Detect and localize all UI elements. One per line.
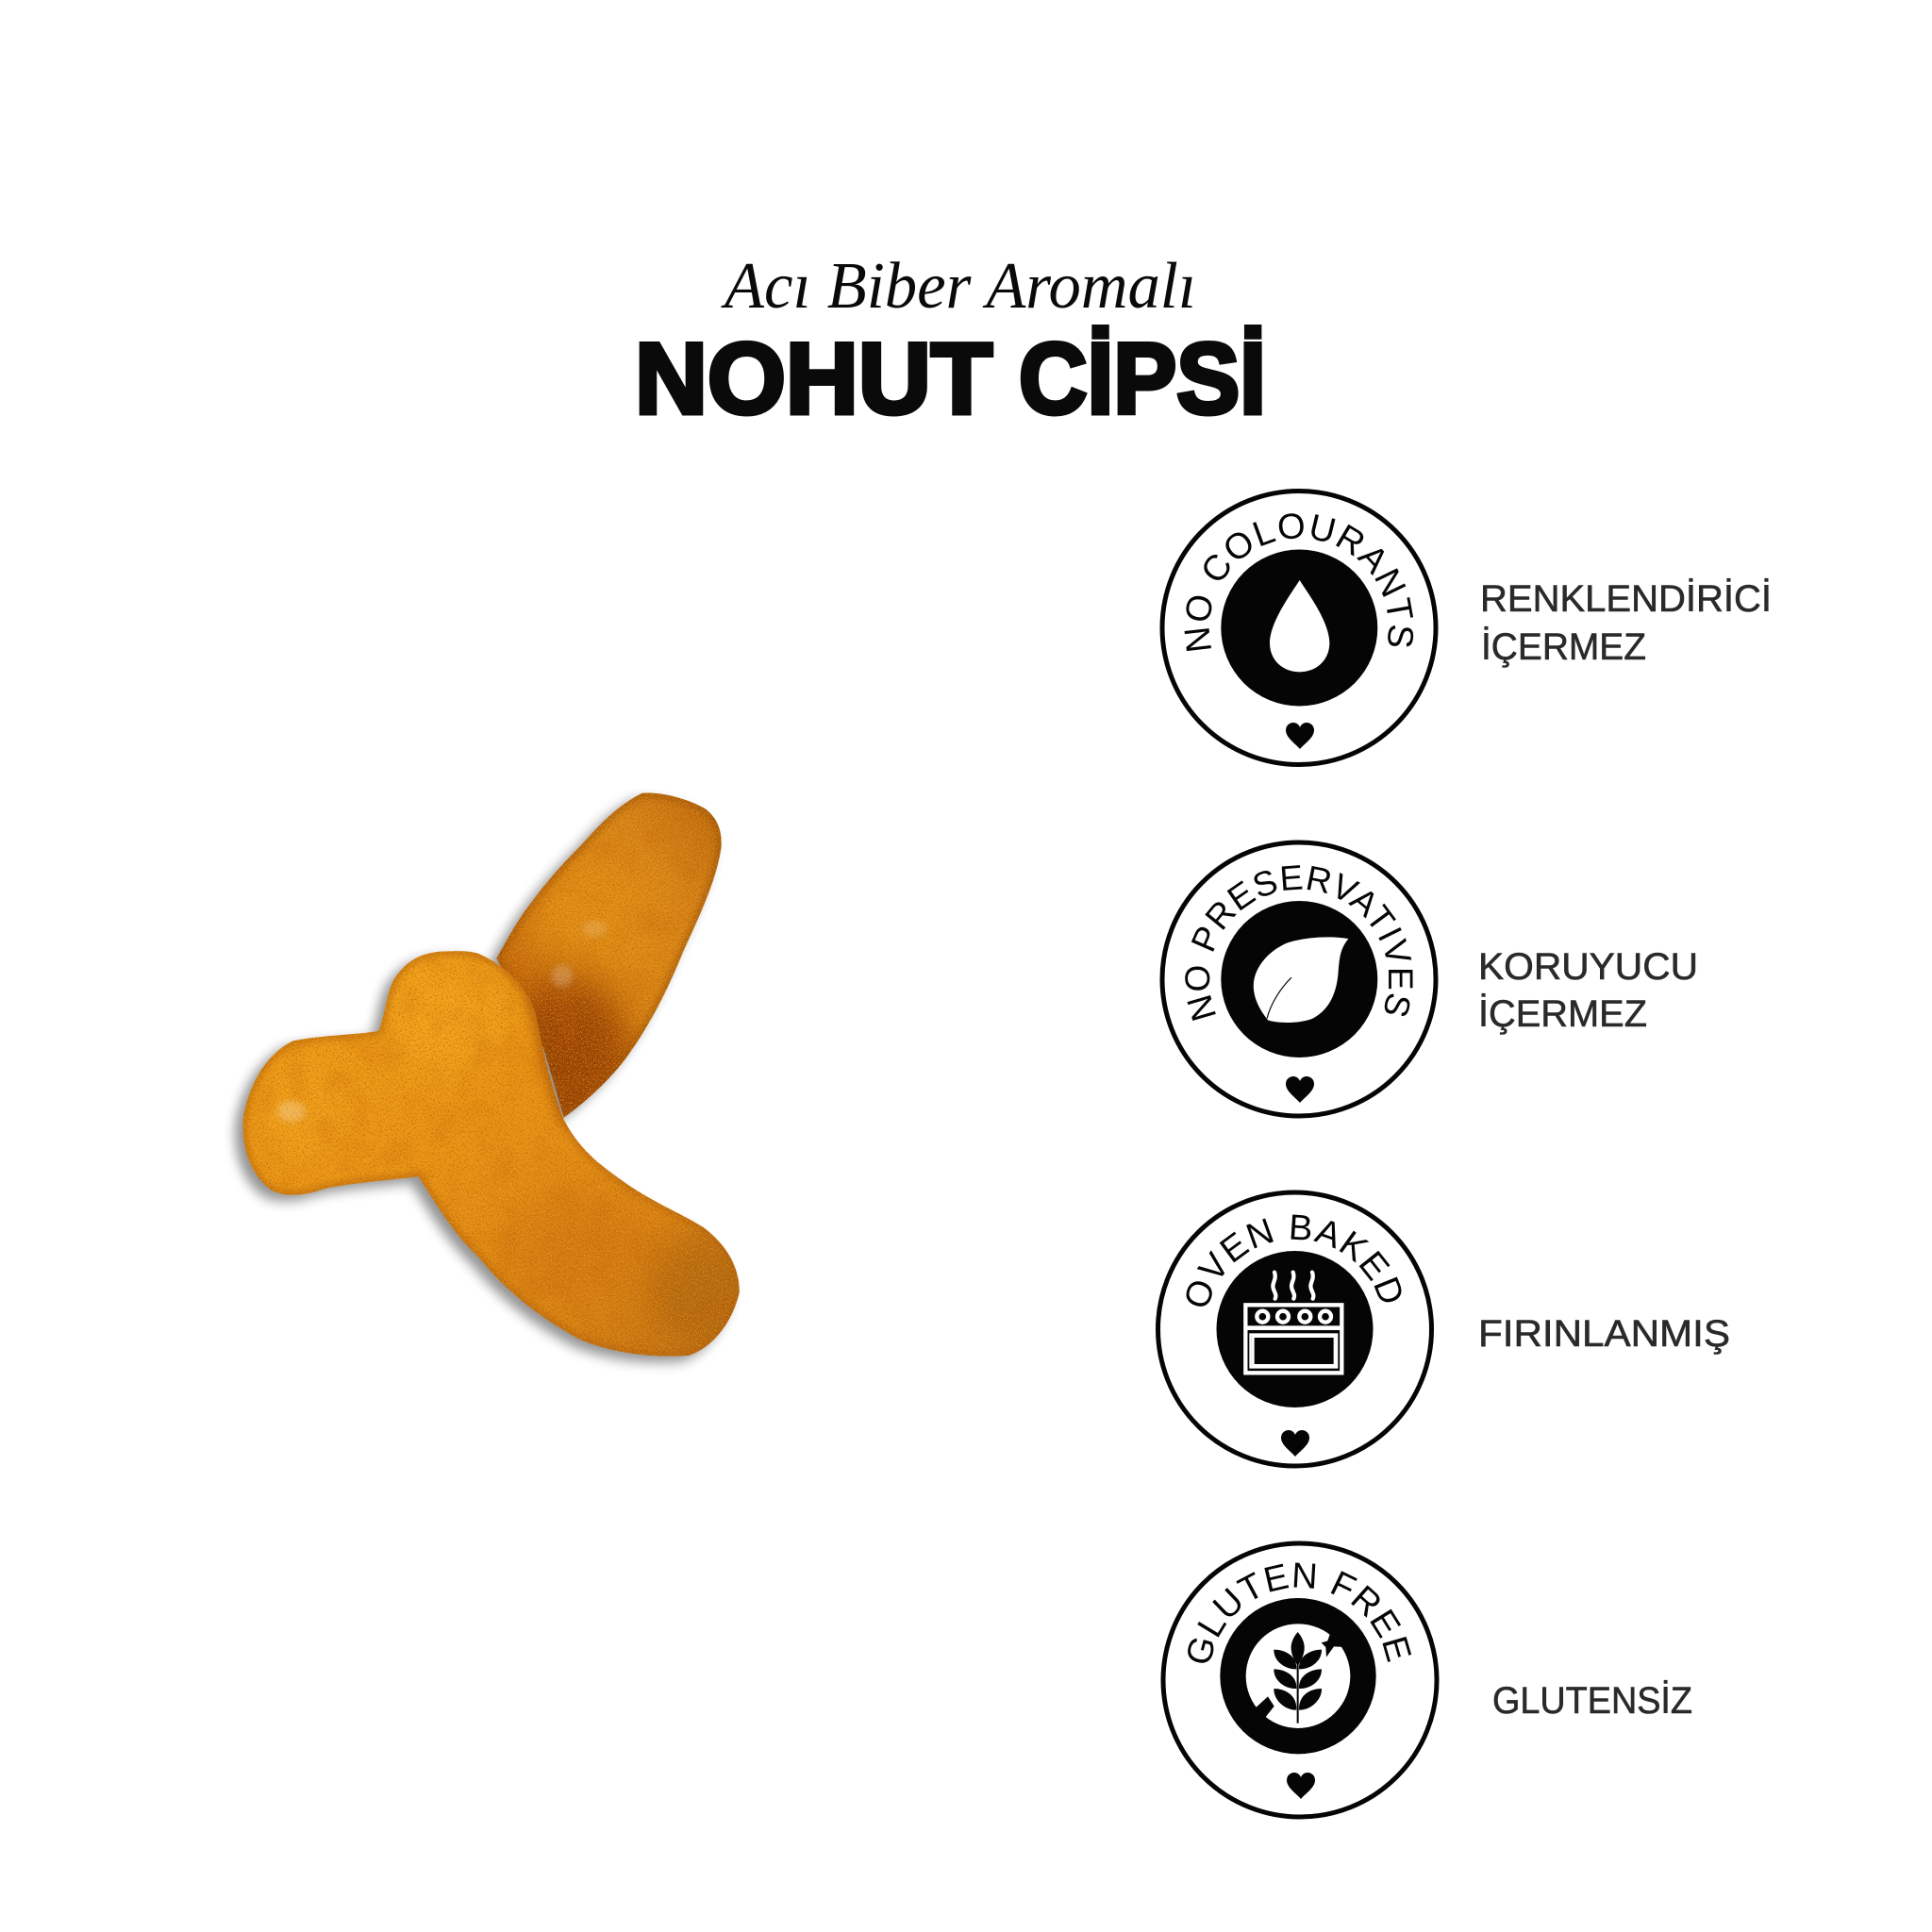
icon: no-gluten symbol [1220,1598,1376,1754]
title: NOHUT CİPSİ [635,322,1266,435]
title: NOHUT CİPSİ: CİPSİ [1019,322,1266,435]
outer ring [1162,842,1436,1116]
label: koruyucu içermez: KORUYUCU [1478,946,1698,988]
icon: leaf [1254,937,1348,1023]
icon: oven [1245,1273,1341,1373]
icon: heart [1281,1430,1309,1457]
label: glutensiz: GLUTENSİZ [1492,1679,1692,1722]
title: NOHUT CİPSİ: NOHUT [635,322,992,435]
label: koruyucu içermez: İÇERMEZ [1478,992,1647,1035]
icon: heart [1287,1773,1315,1799]
label: renklendirici içermez [1480,577,1772,668]
curved text: NO PRESERVATIVES: NO PRESERVATIVES [1185,865,1413,1021]
label: renklendirici içermez: İÇERMEZ [1481,625,1646,668]
curved text: OVEN BAKED: OVEN BAKED [1187,1215,1402,1307]
icon: water drop [1270,580,1329,672]
icon: heart [1286,723,1314,749]
badge: no colourants [1160,489,1438,767]
subtitle: Acı Biber Aromalı: Acı Biber Aromalı [721,250,1196,323]
label: renklendirici içermez: RENKLENDİRİCİ [1480,577,1772,620]
black disc [1221,549,1377,706]
label: fırınlanmış: FIRINLANMIŞ [1478,1313,1730,1355]
badge: oven baked [1156,1191,1434,1468]
product photo: chickpea snack [235,786,758,1367]
outer ring [1158,1192,1432,1466]
icon: heart [1286,1076,1314,1103]
curved text: GLUTEN FREE: GLUTEN FREE [1188,1562,1411,1663]
outer ring [1163,1543,1437,1817]
badge: no preservatives [1160,840,1438,1119]
outer ring [1162,491,1436,764]
black disc [1217,1251,1374,1407]
badge: gluten free [1160,1541,1440,1819]
black disc [1221,901,1377,1058]
label: koruyucu içermez [1478,946,1698,1035]
curved text: NO COLOURANTS: NO COLOURANTS [1185,513,1413,651]
